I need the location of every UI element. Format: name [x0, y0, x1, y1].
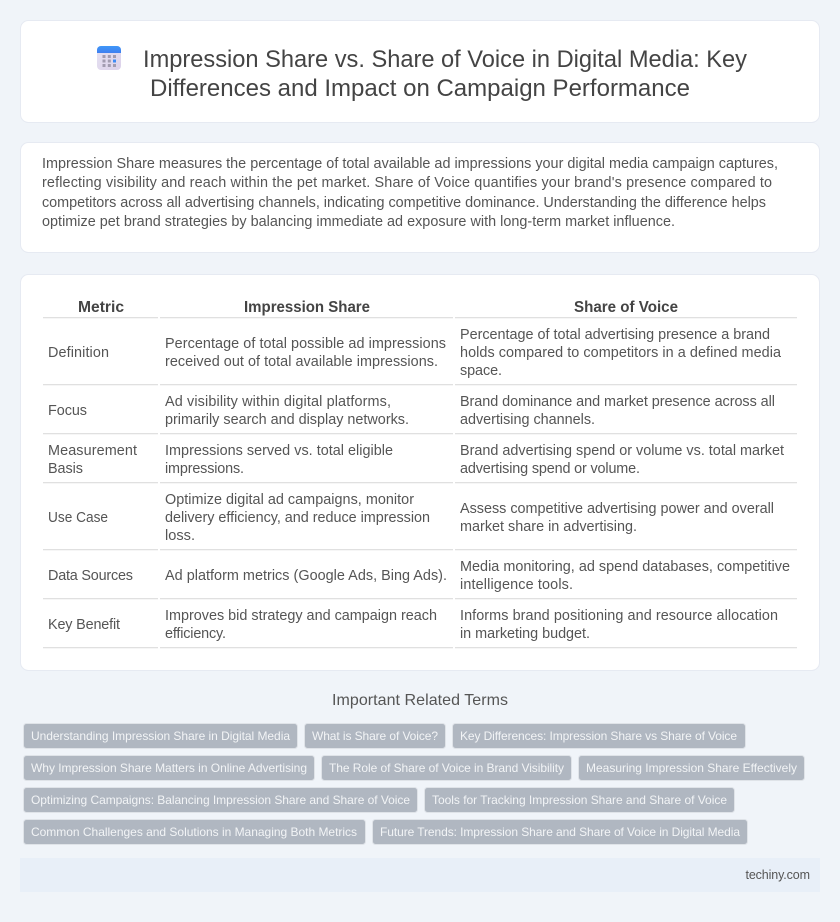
chip: What is Share of Voice: What is Share of Voice?: [312, 729, 438, 743]
table header: Metric: [78, 299, 124, 316]
title: Impression Share vs. Share of Voice in Digital Media: Key: [143, 46, 747, 73]
row: Definition: holds compared to competitors in a defined media: [460, 345, 781, 361]
row: Focus: Brand dominance and market presence across all: [460, 394, 775, 410]
chip: Optimizing Campaigns: [24, 788, 418, 812]
chip: Common Challenges: [24, 820, 366, 844]
related term chips: [24, 724, 804, 844]
chip: Key Differences: [452, 724, 746, 748]
row: Measurement Basis: [43, 443, 797, 483]
title: [143, 46, 747, 102]
footer band: [20, 858, 820, 892]
row: Data Sources: [43, 559, 797, 599]
row: Use Case: Use Case: [48, 510, 108, 526]
row: Key Benefit: Key Benefit: [48, 617, 120, 633]
row: Definition: space.: [460, 363, 502, 379]
row: Measurement Basis: Brand advertising spend or volume vs. total market: [460, 443, 784, 459]
chip: Common Challenges: Common Challenges and Solutions in Managing Both Metrics: [31, 825, 357, 839]
chip: What is Share of Voice: [304, 724, 446, 748]
row: Measurement Basis: Measurement: [48, 443, 137, 459]
row: Key Benefit: in marketing budget.: [460, 626, 590, 642]
row: Focus: Focus: [48, 403, 87, 419]
chip: Understanding Impression Share: Understanding Impression Share in Digital Media: [31, 729, 290, 743]
row: Key Benefit: Improves bid strategy and campaign reach: [165, 608, 437, 624]
chip: Role of Share of Voice: [322, 756, 572, 780]
icon: calendar: [97, 46, 121, 70]
row: Data Sources: intelligence tools.: [460, 577, 573, 593]
panel: intro text: optimize pet brand strategies by balancing immediate ad exposure with long-term market influence.: [42, 214, 675, 230]
table header: [43, 299, 797, 318]
panel: header: [20, 20, 820, 122]
row: Use Case: market share in advertising.: [460, 519, 637, 535]
row: Definition: Percentage of total advertising presence a brand: [460, 327, 770, 343]
chip: Future Trends: Future Trends: Impression Share and Share of Voice in Digital Media: [380, 825, 740, 839]
row: Definition: Definition: [48, 345, 109, 361]
row: Data Sources: Ad platform metrics (Google Ads, Bing Ads).: [165, 568, 447, 584]
row: Key Benefit: Informs brand positioning and resource allocation: [460, 608, 778, 624]
chip: Why Impression Share Matters: Why Impression Share Matters in Online Advertising: [31, 761, 307, 775]
row: Use Case: delivery efficiency, and reduce impression: [165, 510, 430, 526]
row: Key Benefit: efficiency.: [165, 626, 226, 642]
heading: related terms: Important Related Terms: [332, 692, 508, 709]
row: Definition: [43, 327, 797, 385]
row: Use Case: Assess competitive advertising power and overall: [460, 501, 774, 517]
panel: comparison table: [20, 274, 820, 670]
chip: Optimizing Campaigns: Optimizing Campaigns: Balancing Impression Share and Share of Voice: [31, 793, 410, 807]
row: Measurement Basis: impressions.: [165, 461, 244, 477]
table header: Share of Voice: [574, 299, 678, 316]
chip: Why Impression Share Matters: [24, 756, 314, 780]
title: Differences and Impact on Campaign Performance: [150, 75, 690, 102]
chip: Understanding Impression Share: [24, 724, 298, 748]
row: Use Case: loss.: [165, 528, 195, 544]
row: Measurement Basis: advertising spend or volume.: [460, 461, 640, 477]
chip: Key Differences: Key Differences: Impression Share vs Share of Voice: [460, 729, 737, 743]
footer band: techiny.com: [746, 868, 810, 882]
panel: intro text: reflecting visibility and reach within the pet market. Share of Voice quantifies your brand's presence compared to: [42, 175, 772, 191]
row: Measurement Basis: Basis: [48, 461, 83, 477]
row: Focus: Ad visibility within digital platforms,: [165, 394, 391, 410]
row: Key Benefit: [43, 608, 797, 648]
chip: Future Trends: [372, 820, 748, 844]
panel: intro text: Impression Share measures the percentage of total available ad impressions your digital media campaign captures,: [42, 156, 778, 172]
row: Focus: primarily search and display networks.: [165, 412, 409, 428]
chip: Measuring Impression Share: Measuring Impression Share Effectively: [586, 761, 797, 775]
panel: intro text: competitors across all advertising channels, indicating competitive dominance. Understanding the difference helps: [42, 195, 766, 211]
panel: intro text: [20, 142, 820, 252]
row: Use Case: Optimize digital ad campaigns, monitor: [165, 492, 414, 508]
row: Focus: advertising channels.: [460, 412, 595, 428]
chip: Tools for Tracking: Tools for Tracking Impression Share and Share of Voice: [432, 793, 727, 807]
row: Measurement Basis: Impressions served vs. total eligible: [165, 443, 393, 459]
chip: Role of Share of Voice: The Role of Share of Voice in Brand Visibility: [329, 761, 564, 775]
row: Data Sources: Media monitoring, ad spend databases, competitive: [460, 559, 790, 575]
chip: Measuring Impression Share: [578, 756, 804, 780]
table header: Impression Share: [244, 299, 370, 316]
row: Data Sources: Data Sources: [48, 568, 133, 584]
row: Definition: received out of total available impressions.: [165, 354, 438, 370]
row: Focus: [43, 394, 797, 434]
chip: Tools for Tracking: [424, 788, 734, 812]
row: Definition: Percentage of total possible ad impressions: [165, 336, 446, 352]
row: Use Case: [43, 492, 797, 550]
